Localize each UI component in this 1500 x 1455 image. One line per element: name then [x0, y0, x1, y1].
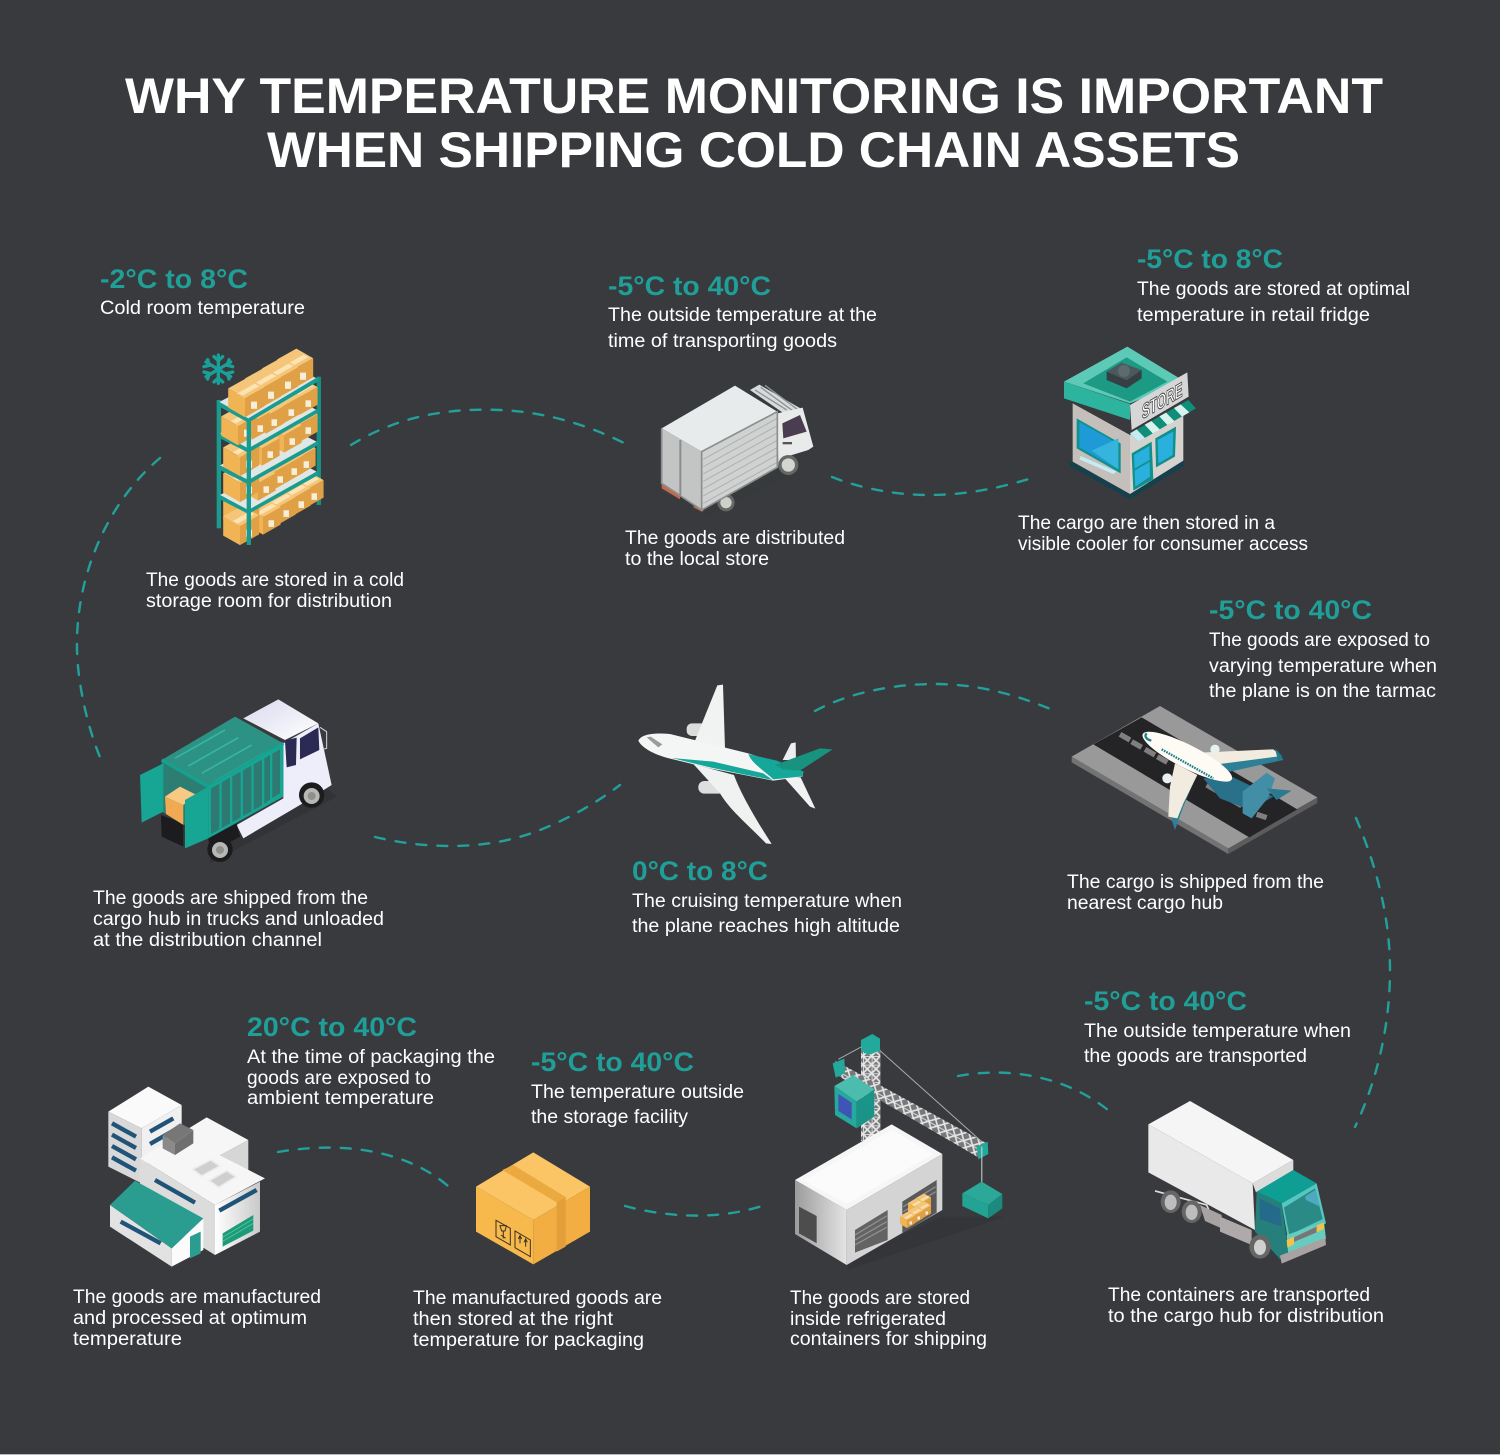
door and right window [1132, 442, 1153, 491]
crane jib [835, 1061, 987, 1158]
main building [220, 1140, 248, 1183]
near wing [698, 781, 725, 794]
step: local distribution: The outside temperature at the [608, 305, 877, 326]
step: storage facility: -5°C to 40°C [531, 1047, 694, 1077]
step: local distribution: The goods are distributed [625, 528, 845, 549]
step: tarmac: The goods are exposed to [1209, 630, 1430, 651]
icon: factory [108, 1087, 265, 1267]
rooftop unit [163, 1135, 175, 1155]
warehouse [110, 1205, 172, 1267]
step: manufacturing: temperature [73, 1329, 182, 1350]
step: manufacturing [73, 1287, 321, 1350]
bottom row boxes [223, 471, 324, 545]
step: cold storage: Cold room temperature [100, 298, 305, 319]
step: refrigerated containers: The goods are stored [790, 1288, 970, 1309]
handling marks [496, 1220, 530, 1257]
crane tower [861, 1049, 880, 1141]
building [795, 1124, 942, 1210]
icon: cold storage shelves [204, 349, 324, 545]
step: retail store: temperature in retail fridge [1137, 305, 1370, 326]
step: local distribution: -5°C to 40°C [608, 271, 771, 301]
fuselage [1137, 724, 1237, 790]
far wing [687, 723, 707, 736]
step: cargo hub trucks: The goods are shipped from the [93, 888, 368, 909]
sign [1130, 372, 1189, 430]
step: local distribution: time of transporting goods [608, 331, 837, 352]
step: cruising: 0°C to 8°C [632, 856, 768, 886]
step: cruising [632, 856, 902, 937]
step: tarmac: the plane is on the tarmac [1209, 681, 1436, 702]
step: tarmac: The cargo is shipped from the [1067, 872, 1324, 893]
step: tarmac: -5°C to 40°C [1209, 595, 1372, 625]
step: packaging exposure: ambient temperature [247, 1088, 434, 1109]
step: cargo hub trucks: cargo hub in trucks and unloaded [93, 909, 384, 930]
second row boxes [221, 378, 318, 445]
cab [237, 699, 332, 838]
step: cruising: The cruising temperature when [632, 891, 902, 912]
front and rear wheels [717, 385, 813, 511]
step: refrigerated containers [790, 1288, 987, 1350]
step: storage facility: the storage facility [531, 1107, 689, 1128]
step: manufacturing: and processed at optimum [73, 1308, 307, 1329]
icon: cardboard box [476, 1152, 590, 1264]
icon: warehouse with crane [795, 1034, 1005, 1270]
awning [1130, 400, 1196, 442]
step: storage facility: The temperature outside [531, 1082, 744, 1103]
hanging container [962, 1182, 1002, 1205]
rooftop unit [1107, 370, 1142, 388]
step: retail store: visible cooler for consumer access [1018, 534, 1308, 555]
step: packaging [413, 1288, 662, 1351]
icon: airplane in flight [638, 685, 833, 844]
step: manufacturing: The goods are manufactured [73, 1287, 321, 1308]
step: cold storage [100, 264, 404, 612]
step: cruising: the plane reaches high altitude [632, 916, 900, 937]
step: local distribution [608, 271, 877, 570]
third row boxes [223, 405, 318, 476]
step: retail store: The goods are stored at optimal [1137, 279, 1410, 300]
icon: plane on runway [1072, 706, 1317, 854]
chassis and wheels [1155, 1190, 1252, 1245]
rear stabilisers [783, 742, 796, 760]
step: cargo hub trucks [93, 888, 384, 951]
title: WHEN SHIPPING COLD CHAIN ASSETS [267, 122, 1240, 178]
left window [1077, 418, 1121, 473]
truck cab [1257, 1170, 1317, 1203]
step: cold storage: storage room for distribution [146, 591, 392, 612]
step: retail store: -5°C to 8°C [1137, 244, 1283, 274]
store base [1069, 461, 1184, 499]
step: storage facility [531, 1047, 744, 1128]
step: retail store: The cargo are then stored in a [1018, 513, 1275, 534]
stored boxes [900, 1193, 931, 1228]
step: cargo hub trucks: at the distribution channel [93, 930, 322, 951]
step: tarmac [1067, 595, 1437, 914]
title [125, 68, 1383, 178]
step: road transport: to the cargo hub for distribution [1108, 1306, 1384, 1327]
plane shadow and wings [1213, 755, 1283, 772]
step: local distribution: to the local store [625, 549, 769, 570]
icon: delivery truck [662, 385, 813, 517]
icon: snowflake [204, 355, 233, 383]
roof [1064, 347, 1185, 403]
step: packaging: The manufactured goods are [413, 1288, 662, 1309]
step: packaging: then stored at the right [413, 1309, 614, 1330]
fourth row boxes [223, 439, 316, 502]
step: packaging: temperature for packaging [413, 1330, 644, 1351]
crane cabin [834, 1075, 874, 1102]
step: tarmac: varying temperature when [1209, 656, 1437, 677]
step: road transport: the goods are transported [1084, 1046, 1307, 1067]
dashed route connectors [77, 410, 1390, 1216]
step: cold storage: -2°C to 8°C [100, 264, 248, 294]
step: road transport [1084, 986, 1384, 1327]
step: refrigerated containers: containers for shipping [790, 1329, 987, 1350]
icon: refrigerated truck [1148, 1101, 1326, 1264]
title: WHY TEMPERATURE MONITORING IS IMPORTANT [125, 68, 1383, 124]
step: packaging exposure: goods are exposed to [247, 1068, 431, 1089]
step: packaging exposure: 20°C to 40°C [247, 1012, 417, 1042]
step: refrigerated containers: inside refrigerated [790, 1309, 946, 1330]
icon: store [1064, 347, 1196, 499]
step: tarmac: nearest cargo hub [1067, 893, 1223, 914]
step: packaging exposure: At the time of packaging the [247, 1047, 495, 1068]
step: packaging exposure [247, 1012, 495, 1109]
step: road transport: The outside temperature when [1084, 1021, 1351, 1042]
store sign text: STORE [1142, 378, 1183, 424]
fuselage [638, 733, 803, 781]
step: retail store [1018, 244, 1410, 555]
container [162, 760, 208, 838]
tower [108, 1087, 182, 1128]
step: road transport: The containers are transported [1108, 1285, 1370, 1306]
step: road transport: -5°C to 40°C [1084, 986, 1247, 1016]
top row boxes [228, 349, 313, 417]
step: cold storage: The goods are stored in a cold [146, 570, 404, 591]
icon: green distribution truck [140, 699, 337, 863]
